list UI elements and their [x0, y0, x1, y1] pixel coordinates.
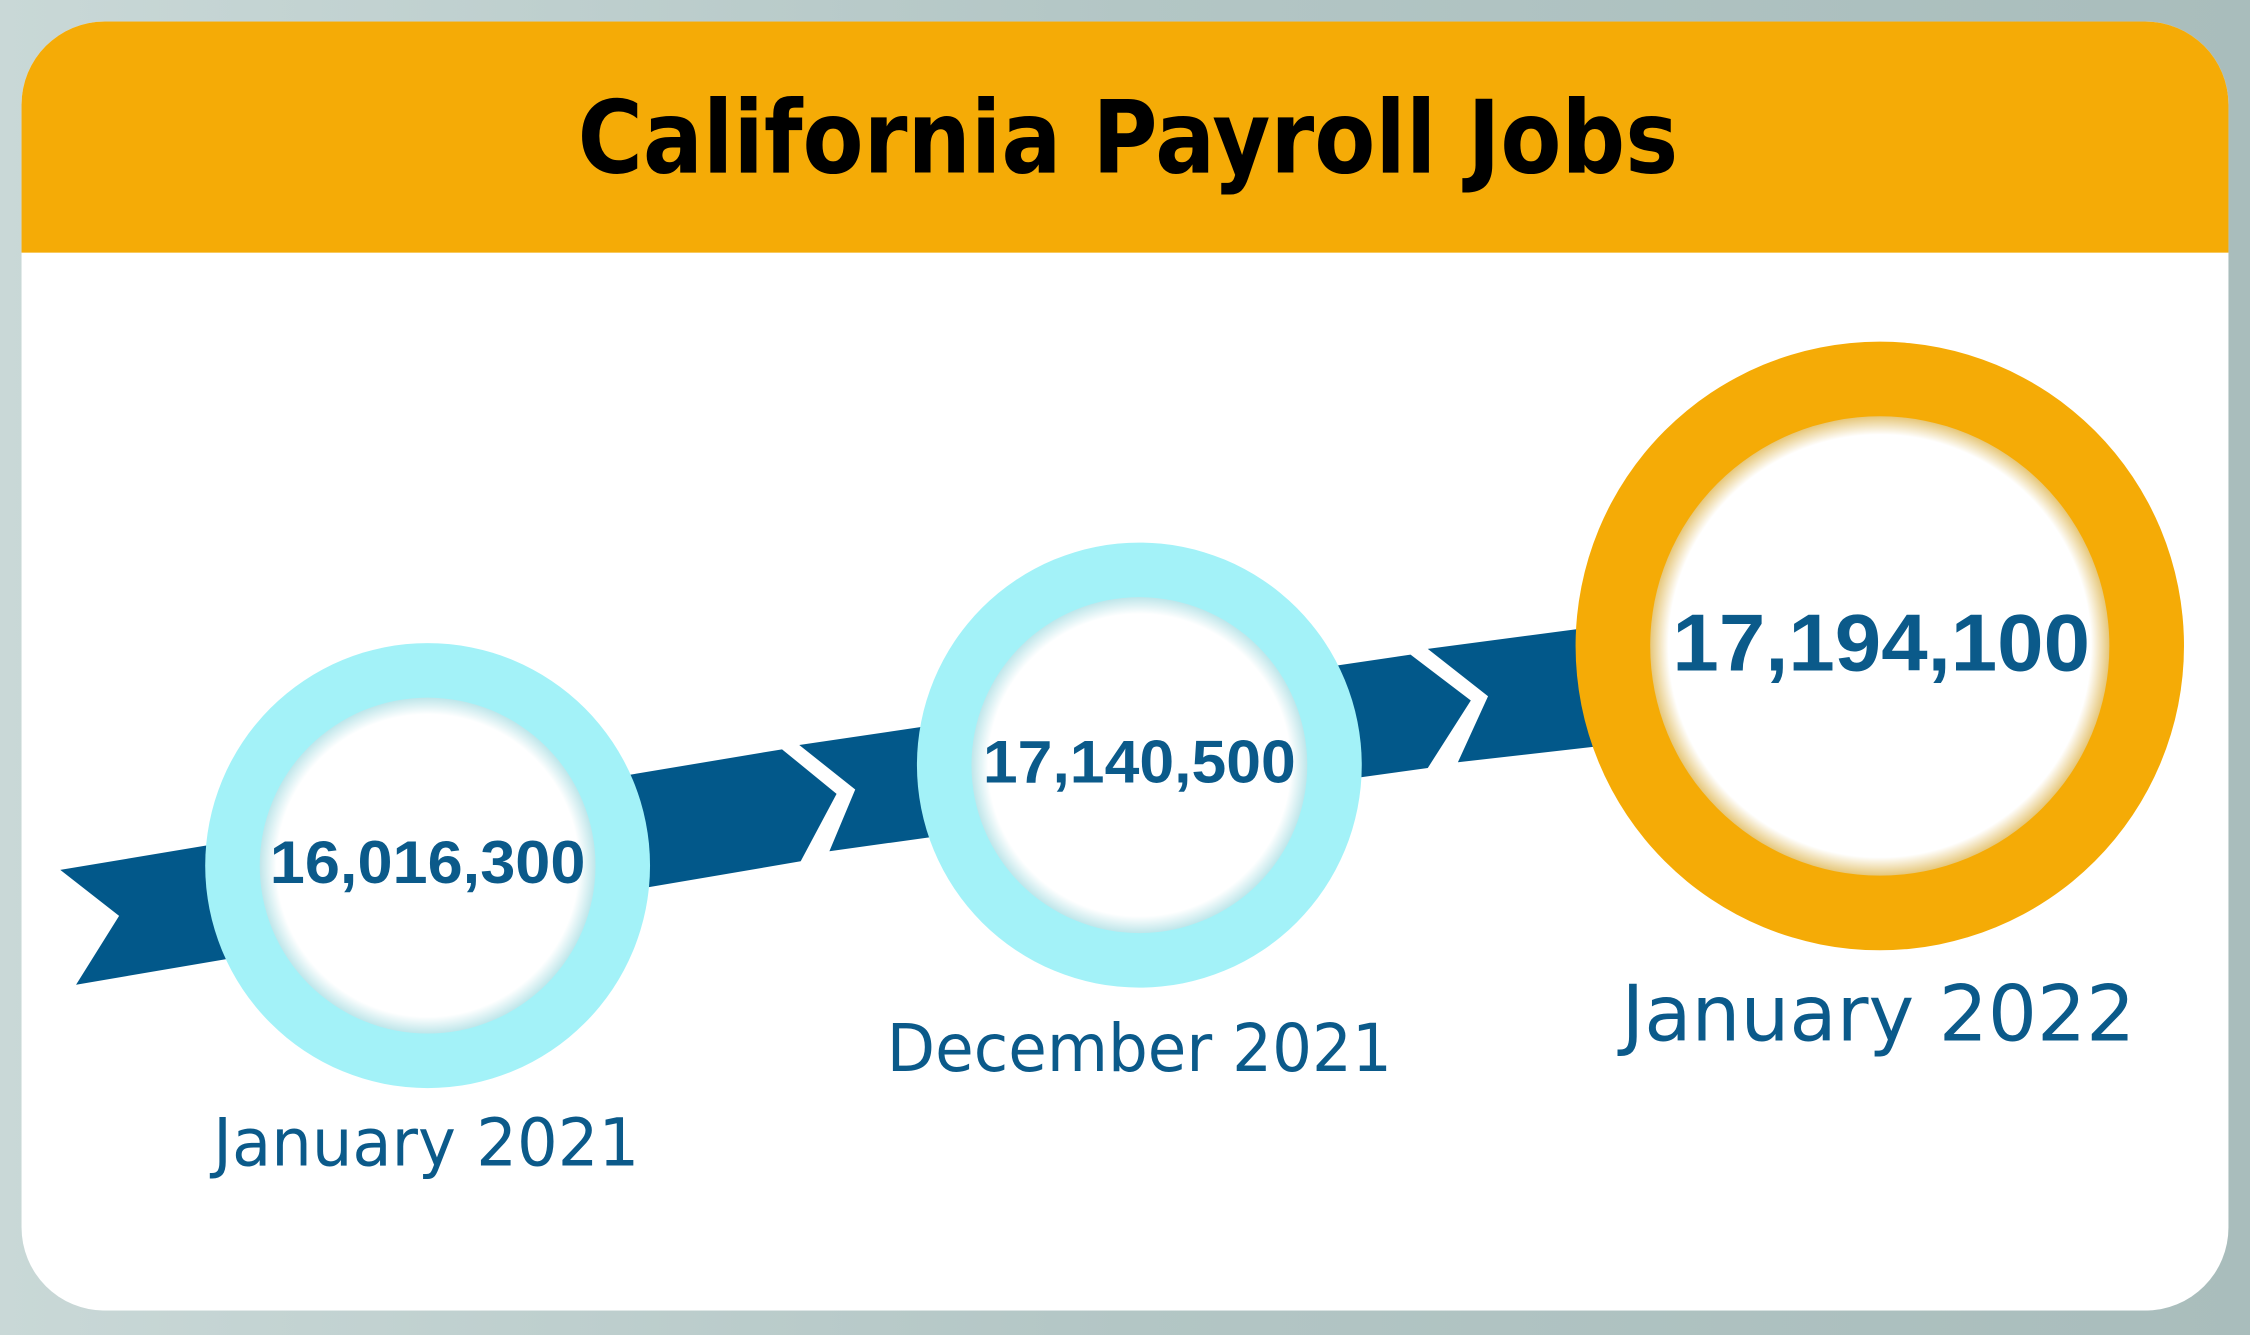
label: January 2021: January 2021 [209, 1105, 639, 1182]
circle: January 2021 [205, 643, 650, 1088]
value: December 2021: 17,140,500 [983, 727, 1296, 795]
value: January 2021: 16,016,300 [270, 828, 585, 896]
value: January 2022: 17,194,100 [1672, 598, 2090, 688]
ribbon segment 2 [799, 655, 1471, 851]
ribbon segment 3 [1428, 610, 1722, 762]
ribbon segment 1 [60, 749, 837, 985]
circle: December 2021 [917, 543, 1362, 988]
label: January 2022: January 2022 [1617, 970, 2135, 1060]
header bar [22, 22, 2228, 253]
circle: January 2022 [1576, 342, 2184, 950]
label: December 2021: December 2021 [887, 1010, 1392, 1087]
title: California Payroll Jobs [578, 79, 1678, 196]
